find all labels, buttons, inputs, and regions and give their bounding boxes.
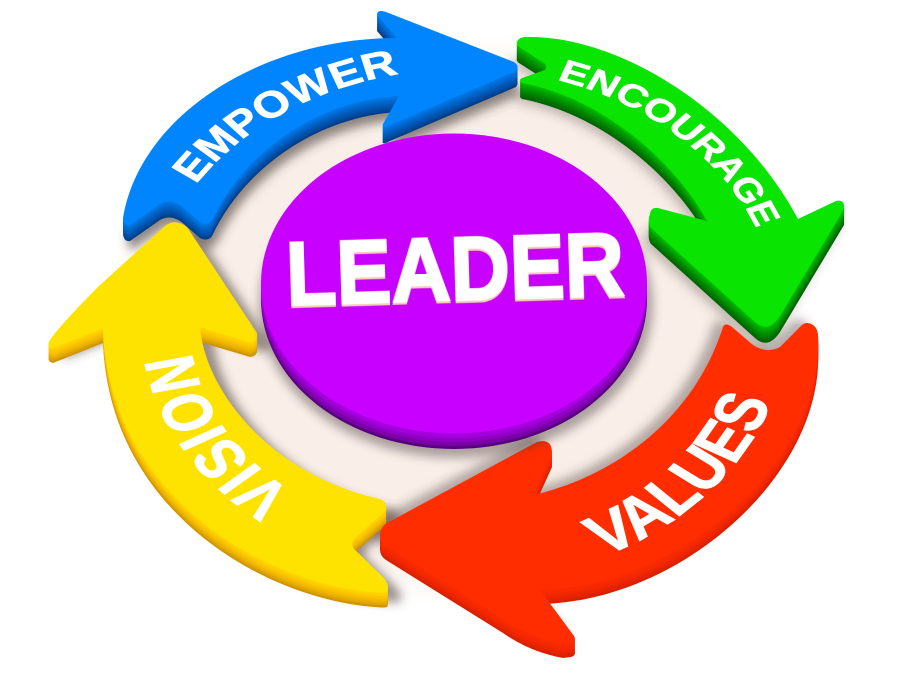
label: encourage: ENCOURAGE bbox=[558, 60, 781, 228]
arrow shadows bbox=[62, 35, 839, 640]
arrow: encourage bbox=[516, 36, 844, 382]
label: empower: EMPOWER bbox=[171, 51, 399, 183]
center disc shadow bbox=[259, 152, 653, 458]
label: values: VALUES bbox=[579, 393, 768, 551]
arrow: values bbox=[380, 323, 818, 658]
ground glow bbox=[130, 58, 780, 582]
label: leader: LEADER bbox=[285, 215, 625, 325]
arrow: vision bbox=[48, 222, 388, 608]
arrow: empower bbox=[123, 11, 518, 242]
label: vision: VISION bbox=[144, 356, 282, 523]
center disc bbox=[261, 134, 647, 449]
